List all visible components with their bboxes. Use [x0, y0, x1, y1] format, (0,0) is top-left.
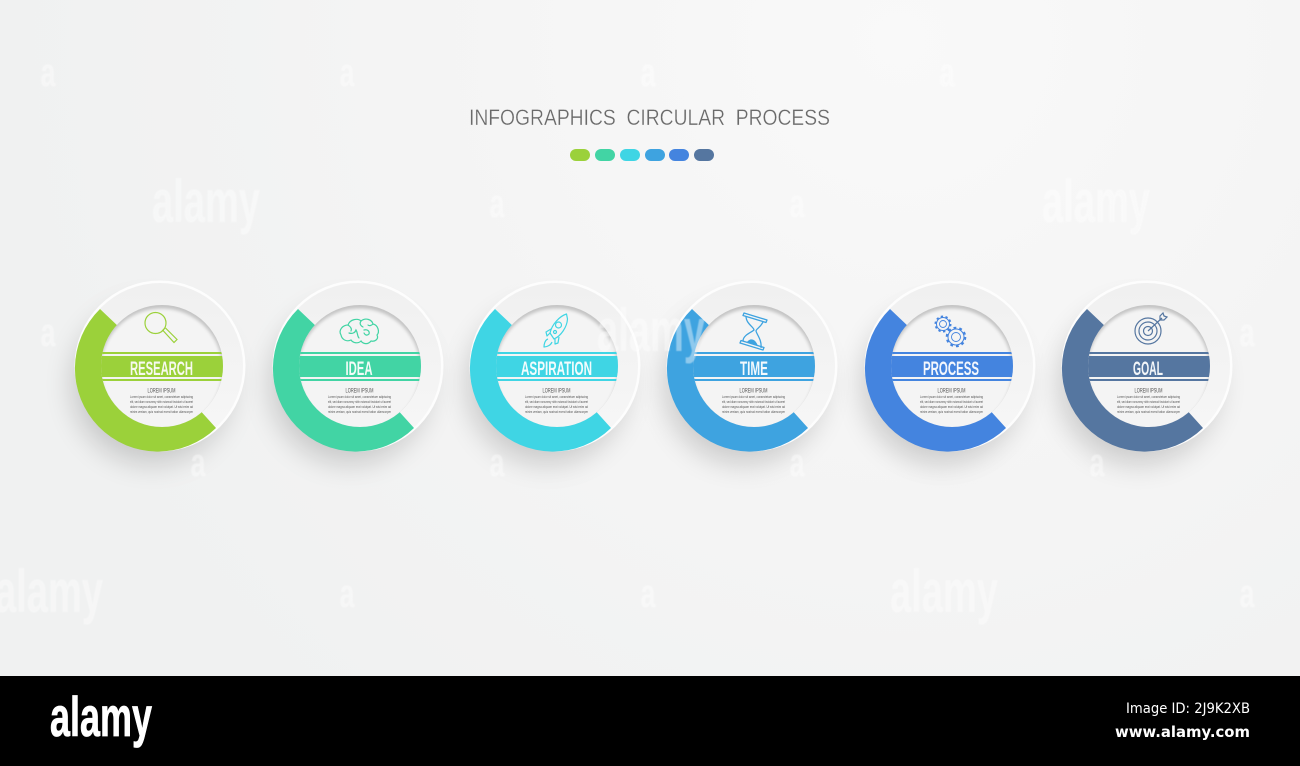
- watermarks: a: [1090, 441, 1105, 485]
- body text: [525, 388, 589, 414]
- body text: [328, 388, 392, 414]
- body text: elit, sed diam nonummy nibh euismod tincidunt ut laoreet: [1117, 399, 1181, 404]
- icon: magnifier: [145, 312, 177, 342]
- body text: elit, sed diam nonummy nibh euismod tincidunt ut laoreet: [328, 399, 392, 404]
- watermarks: [0, 51, 1255, 625]
- title: INFOGRAPHICS CIRCULAR PROCESS: [469, 105, 830, 130]
- body text: [130, 388, 194, 414]
- body text: Lorem ipsum dolor sit amet, consectetuer adipiscing: [328, 394, 391, 399]
- body text: [920, 388, 984, 414]
- body text: minim veniam, quis nostrud exerci tation ullamcorper: [328, 409, 391, 414]
- body text: minim veniam, quis nostrud exerci tation ullamcorper: [1117, 409, 1180, 414]
- label: PROCESS: [923, 358, 979, 380]
- watermarks: a: [1240, 572, 1255, 616]
- body text: dolore magna aliquam erat volutpat. Ut wisi enim ad: [1117, 404, 1180, 409]
- watermarks: alamy: [1042, 168, 1150, 235]
- body text: dolore magna aliquam erat volutpat. Ut wisi enim ad: [525, 404, 588, 409]
- body text: dolore magna aliquam erat volutpat. Ut wisi enim ad: [920, 404, 983, 409]
- label: GOAL: [1133, 358, 1163, 380]
- body text: dolore magna aliquam erat volutpat. Ut wisi enim ad: [722, 404, 785, 409]
- panel: idea: [270, 280, 444, 464]
- image id: Image ID: 2J9K2XB: [1126, 701, 1250, 717]
- body text: LOREM IPSUM: [542, 388, 570, 394]
- band: [1085, 352, 1213, 381]
- body text: minim veniam, quis nostrud exerci tation ullamcorper: [722, 409, 785, 414]
- body text: minim veniam, quis nostrud exerci tation ullamcorper: [130, 409, 193, 414]
- watermarks: a: [340, 51, 355, 95]
- body text: LOREM IPSUM: [938, 388, 966, 394]
- icon: gears: [936, 316, 965, 346]
- watermarks: a: [40, 311, 56, 355]
- watermarks: alamy: [0, 558, 103, 625]
- body text: LOREM IPSUM: [740, 388, 768, 394]
- body text: dolore magna aliquam erat volutpat. Ut wisi enim ad: [328, 404, 391, 409]
- icon: target: [1135, 313, 1167, 344]
- body text: Lorem ipsum dolor sit amet, consectetuer adipiscing: [1117, 394, 1180, 399]
- watermarks: a: [1240, 311, 1255, 355]
- panel: research: [72, 280, 246, 464]
- label: IDEA: [346, 358, 372, 380]
- body text: Lorem ipsum dolor sit amet, consectetuer adipiscing: [920, 394, 983, 399]
- body text: LOREM IPSUM: [1134, 388, 1162, 394]
- body text: elit, sed diam nonummy nibh euismod tincidunt ut laoreet: [525, 399, 589, 404]
- panel: goal: [1059, 280, 1232, 464]
- watermarks: a: [490, 182, 505, 226]
- panel: time: [664, 280, 838, 464]
- body text: LOREM IPSUM: [346, 388, 374, 394]
- body text: minim veniam, quis nostrud exerci tation ullamcorper: [525, 409, 588, 414]
- watermarks: a: [790, 441, 805, 485]
- body text: Lorem ipsum dolor sit amet, consectetuer adipiscing: [722, 394, 785, 399]
- body text: [1117, 388, 1181, 414]
- body text: elit, sed diam nonummy nibh euismod tincidunt ut laoreet: [130, 399, 194, 404]
- panel: aspiration: [467, 280, 640, 464]
- body text: elit, sed diam nonummy nibh euismod tincidunt ut laoreet: [920, 399, 984, 404]
- label: ASPIRATION: [521, 358, 592, 380]
- watermarks: alamy: [152, 168, 260, 235]
- arc: [273, 309, 414, 452]
- colour legend dots: [570, 149, 714, 161]
- body text: minim veniam, quis nostrud exerci tation ullamcorper: [920, 409, 983, 414]
- icon: brain: [340, 319, 378, 344]
- band: [296, 352, 424, 381]
- body text: Lorem ipsum dolor sit amet, consectetuer adipiscing: [130, 394, 193, 399]
- band: [493, 352, 621, 381]
- watermarks: a: [190, 441, 206, 485]
- watermarks: alamy: [597, 297, 705, 364]
- arc: [865, 309, 1006, 452]
- watermarks: alamy: [890, 558, 998, 625]
- label: TIME: [740, 358, 768, 380]
- body text: [722, 388, 786, 414]
- panel: process: [862, 280, 1036, 464]
- icon: rocket: [544, 314, 568, 347]
- body text: elit, sed diam nonummy nibh euismod tincidunt ut laoreet: [722, 399, 786, 404]
- footer bar: [0, 676, 1300, 766]
- footer logo: alamy: [50, 685, 152, 748]
- watermarks: a: [640, 572, 656, 616]
- watermarks: a: [940, 51, 955, 95]
- band: [690, 352, 818, 381]
- arc: [470, 309, 611, 452]
- body text: dolore magna aliquam erat volutpat. Ut wisi enim ad: [130, 404, 193, 409]
- watermarks: a: [40, 51, 56, 95]
- arc: [667, 309, 808, 452]
- arc: [1062, 309, 1203, 452]
- band: [98, 352, 226, 381]
- label: RESEARCH: [130, 358, 193, 380]
- icon: hourglass: [740, 313, 767, 350]
- watermarks: a: [790, 182, 805, 226]
- body text: LOREM IPSUM: [148, 388, 176, 394]
- website: www.alamy.com: [1115, 723, 1250, 741]
- body text: Lorem ipsum dolor sit amet, consectetuer adipiscing: [525, 394, 588, 399]
- watermarks: a: [340, 572, 355, 616]
- watermarks: a: [490, 441, 505, 485]
- band: [888, 352, 1016, 381]
- watermarks: a: [640, 51, 656, 95]
- arc: [75, 309, 216, 452]
